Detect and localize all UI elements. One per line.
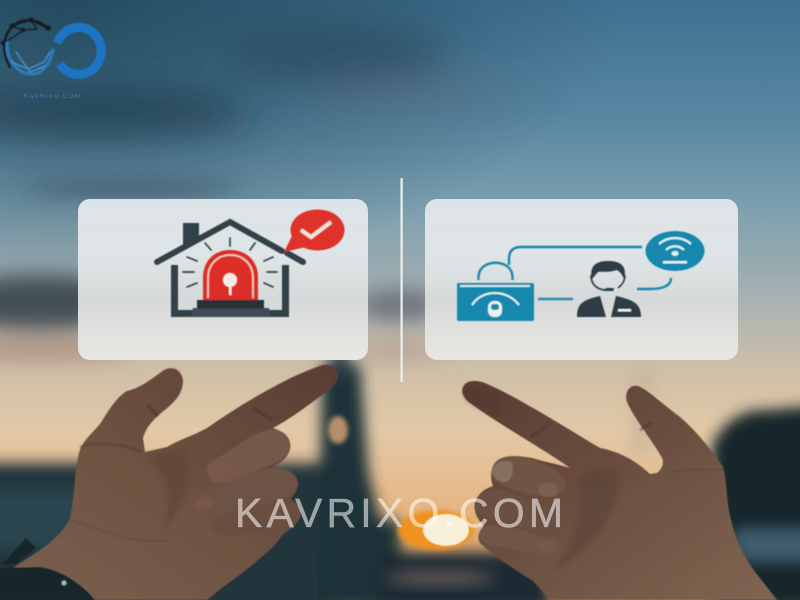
watch band [0,567,95,600]
connector lines [509,247,671,299]
logo [1,18,101,100]
logo: blue ring [58,27,101,74]
right hand [462,381,777,600]
icon: speech bubble check [284,210,344,252]
icon: house with siren [157,210,344,317]
icon: support agent [577,261,641,317]
watermark: KAVRIXO.COM [235,490,563,536]
finger: lower curled [479,525,558,555]
palm shadow [148,448,188,535]
divider [400,178,403,382]
finger: middle curled [475,490,568,534]
icon: wifi badge [646,231,704,271]
palm shading [555,468,618,570]
hand outline [0,365,338,600]
icon: padlock [457,263,534,321]
icon: monitoring network [457,231,704,321]
left hand [0,365,338,600]
hand outline [462,381,777,600]
logo: wordmark: KAVRIXO.COM [24,94,80,100]
panel: monitoring [425,199,738,360]
finger: little [212,502,301,535]
panel: alarm [78,199,368,360]
finger: upper curled [492,456,565,497]
finger: middle [206,429,290,483]
sun glow [398,510,474,550]
finger: ring [193,468,298,516]
logo: mesh ring [1,18,53,74]
